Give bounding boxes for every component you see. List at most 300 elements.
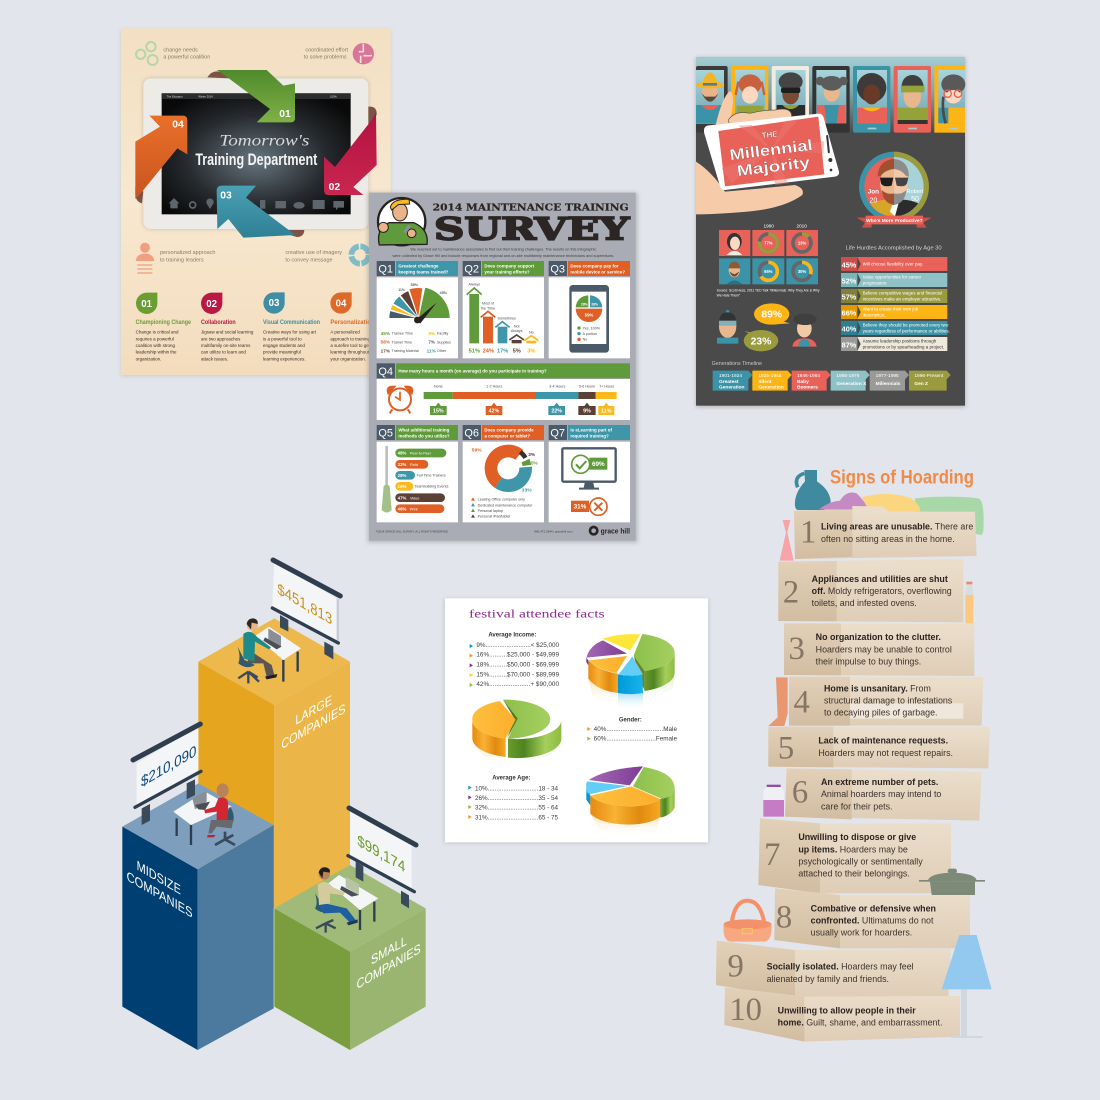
label: large companies: LARGE xyxy=(295,692,332,728)
jon vs robert circle: Jon xyxy=(868,189,879,196)
Q7 panel: Q7 xyxy=(550,428,565,440)
Q7 panel: Is eLearning part of xyxy=(570,427,612,432)
column: midsize companies xyxy=(122,783,274,1050)
life hurdles list: Value opportunities for career xyxy=(863,275,922,280)
legend: 58% xyxy=(381,340,391,345)
icon: lamp xyxy=(942,935,992,1038)
icon: imagery ring xyxy=(351,246,369,264)
intro text: We reached out to maintenance associates to find out their training challenges. The results on this infographic xyxy=(410,248,596,252)
icon: purple jar xyxy=(763,785,784,817)
badge 04 column: Personalization xyxy=(330,320,375,326)
donut chart: Personal laptop xyxy=(478,509,503,513)
jon vs robert circle xyxy=(859,152,929,222)
Q7 panel xyxy=(549,425,630,522)
legend: 9% xyxy=(428,331,436,336)
years comparison grid: We Hate Them" xyxy=(717,293,741,297)
donut chart xyxy=(471,441,539,519)
box 1 xyxy=(794,506,977,559)
arrow 03: teal: 03 xyxy=(220,190,232,201)
badge 03 column: Creative ways for using art xyxy=(263,330,317,335)
life hurdles list: 45% xyxy=(842,260,857,269)
box 8: 8 xyxy=(776,900,792,936)
badge 03 column: is a powerful tool to xyxy=(263,336,302,341)
Q6 panel: Q6 xyxy=(464,428,479,440)
stacked bar: 15% xyxy=(433,409,444,415)
icon: mascot xyxy=(378,198,427,245)
donut chart: Leasing Office computer only xyxy=(478,498,525,502)
box 5: 5 xyxy=(778,730,794,766)
phone: red hair xyxy=(731,66,768,133)
badge 03 column: provide meaningful xyxy=(263,350,301,355)
icon: phone with pie: No xyxy=(583,338,587,342)
bar chart: 51% xyxy=(469,348,480,354)
pie chart: income xyxy=(586,634,675,710)
list: gender: 60%............................Female xyxy=(594,736,677,743)
box 1: Living areas are unusable. There are xyxy=(821,522,973,532)
list: average income: 42%.......................+ $90,000 xyxy=(476,681,559,688)
Q6 panel: Does company provide xyxy=(484,427,534,432)
badge 02 column: 02 xyxy=(206,299,217,310)
Q2 panel: Q2 xyxy=(464,264,479,276)
badge 04 column: a surefire tool to get xyxy=(330,343,371,348)
icon: phone with pie: 28% xyxy=(581,302,588,306)
icon: laundry pile xyxy=(819,493,984,535)
stacked bar: 11% xyxy=(601,409,612,415)
list: average income: 18%..........$50,000 - $69,999 xyxy=(476,662,559,669)
stacked bar: 22% xyxy=(551,409,562,415)
Q3 panel: mobile device or service? xyxy=(570,269,625,274)
years comparison grid: 65% xyxy=(764,269,773,274)
billboard: large $451,813: $451,813 xyxy=(277,580,332,629)
box 10: 10 xyxy=(729,992,762,1028)
stacked bar: None xyxy=(434,384,443,388)
badge 03 column: Visual Communication xyxy=(263,320,320,326)
years comparison grid: 2010 xyxy=(796,224,807,229)
title: Tomorrow's: Tomorrow's xyxy=(219,133,309,150)
box 8: Combative or defensive when xyxy=(811,903,936,913)
life hurdles list: 87% xyxy=(842,340,857,349)
list: gender: Gender: xyxy=(619,717,642,723)
box 7: attached to their belongings. xyxy=(798,869,910,879)
arrow 04: orange: 04 xyxy=(172,120,184,131)
list: average income xyxy=(470,633,559,688)
icon: pink vase xyxy=(780,520,794,561)
person: midsize company desk xyxy=(173,783,235,845)
tablet: 100% xyxy=(330,95,337,99)
title: Signs of Hoarding xyxy=(830,467,974,488)
life hurdles list: progression. xyxy=(863,280,887,285)
list: average age: 32%.............................55 - 64 xyxy=(475,805,558,812)
life hurdles list: Believe they should be promoted every two xyxy=(863,323,949,328)
icon: man xyxy=(727,262,742,284)
box 2: 2 xyxy=(783,575,799,611)
life hurdles list: 57% xyxy=(842,292,857,301)
icon: coalition circles xyxy=(136,42,158,65)
icon: phone with pie: 28% xyxy=(591,302,598,306)
box 10: Unwilling to allow people in their xyxy=(778,1005,916,1015)
Q1 panel: Greatest challenge xyxy=(398,263,439,268)
text: coordinated effort: to solve problems xyxy=(304,55,347,61)
badge 02 column: can utilize to learn and xyxy=(201,350,246,355)
title: 2014 maintenance training: 2014 MAINTENANCE TRAINING xyxy=(433,204,629,214)
life hurdles list xyxy=(841,245,950,351)
generations timeline xyxy=(712,361,951,391)
jon vs robert circle: 50 xyxy=(911,196,919,203)
donut chart: 59% xyxy=(472,448,482,454)
life hurdles list: years regardless of performance or abilities. xyxy=(863,328,950,333)
stacked bar: 1-2 Hours xyxy=(486,384,503,388)
badge 04 column: A personalized xyxy=(330,330,360,335)
pill bars: 19% xyxy=(398,484,406,489)
list: average age: 10%.............................18 - 34 xyxy=(475,785,558,792)
icon: phone with pie: A portion xyxy=(583,332,597,336)
arrow 04: orange xyxy=(135,116,187,203)
life hurdles list: 40% xyxy=(842,324,857,333)
box 6: Animal hoarders may intend to xyxy=(821,789,941,799)
badge 02 column: multifamily on-site teams xyxy=(201,343,251,348)
billboard: midsize $210,090: $210,090 xyxy=(141,742,196,791)
icon: puzzle circle xyxy=(353,43,374,64)
Q5 panel: methods do you utilize? xyxy=(398,433,450,438)
bar chart: 24% xyxy=(483,348,494,354)
badge 02 column: Collaboration xyxy=(201,320,236,326)
generations timeline: Generation xyxy=(719,385,745,391)
pill bars: Field xyxy=(410,463,418,467)
years comparison grid: Source: Scott Hess, 2011 TED Talk "Millennials: Why They Are & Why xyxy=(717,289,820,293)
generations timeline: Silent xyxy=(758,379,772,385)
icon: monitor with check: 69% xyxy=(592,461,605,468)
stacked bar: 5-6 Hours xyxy=(579,384,595,388)
generations timeline: Millennials xyxy=(876,381,901,387)
legend: Other xyxy=(437,349,447,353)
icon: x mark: 31% xyxy=(574,504,587,511)
legend xyxy=(381,331,451,353)
footer: grace hill xyxy=(601,526,630,535)
phone: hat man xyxy=(696,66,728,133)
box 9: 9 xyxy=(728,949,744,985)
box 3: 3 xyxy=(789,631,805,667)
icon: person and list xyxy=(136,243,154,274)
Q3 panel xyxy=(549,261,630,358)
life hurdles list: Will choose flexibility over pay. xyxy=(863,261,923,266)
generations timeline: 1901-1924 xyxy=(719,373,742,379)
life hurdles list: Believe competitive wages and financial xyxy=(863,291,942,296)
pill bars: 48% xyxy=(398,451,406,456)
pill bars: Full Time Trainers xyxy=(417,474,446,478)
person: small company desk xyxy=(315,867,378,933)
badge 01 column: coalition with strong xyxy=(136,343,176,348)
life hurdles list: incentives make an employer attractive. xyxy=(863,296,941,301)
text: creative imagery: to convey message xyxy=(285,257,333,263)
Q1 panel: 11% xyxy=(398,288,405,292)
donut chart: Dedicated maintenance computer xyxy=(478,503,533,507)
tablet xyxy=(143,78,368,229)
badge 03 column: 03 xyxy=(269,298,280,309)
box 2: off. Moldy refrigerators, overflowing xyxy=(812,586,952,596)
Q2 panel: your training efforts? xyxy=(484,269,530,274)
list: gender xyxy=(587,717,677,743)
badge 02 column xyxy=(201,293,254,361)
box 7: 7 xyxy=(764,837,780,873)
life hurdles list: Assume leadership positions through xyxy=(863,339,937,344)
list: average age: Average Age: xyxy=(492,775,530,781)
box 9 xyxy=(716,941,951,998)
box 1: 1 xyxy=(800,515,816,551)
donut chart: 33% xyxy=(522,488,532,494)
years comparison grid: 1980 xyxy=(763,224,774,229)
life hurdles list: 66% xyxy=(842,308,857,317)
box 4: 4 xyxy=(794,684,810,720)
generations timeline: Gen Z xyxy=(914,381,928,387)
badge 04 column: your organization. xyxy=(330,356,366,361)
pie chart: age xyxy=(586,766,675,838)
generations timeline: 1925-1945 xyxy=(758,373,782,379)
box 5 xyxy=(768,727,990,768)
text: personalized approach: personalized approach xyxy=(160,250,215,256)
generations timeline: Baby xyxy=(797,379,809,385)
badge 01 column: Change is critical and xyxy=(136,330,179,335)
box 6 xyxy=(785,768,982,821)
ribbon: who's more productive xyxy=(857,216,932,228)
Q7 panel: required training? xyxy=(570,433,609,438)
badge 01 column: organization. xyxy=(136,356,161,361)
Q1 panel xyxy=(377,261,458,358)
Q5 panel: What additional training xyxy=(398,427,450,432)
bar chart: Not xyxy=(514,325,520,329)
pill bars: Print xyxy=(410,507,418,511)
life hurdles list: Want to create their own job xyxy=(863,307,919,312)
footer: 866.472.2944 | gracehill.com xyxy=(534,530,573,534)
panel: millennial majority poster xyxy=(696,58,965,407)
years comparison grid: 30% xyxy=(798,269,806,274)
title: survey: SURVEY xyxy=(434,211,631,247)
title: the millennial majority: Majority xyxy=(736,154,811,180)
Q6 panel xyxy=(463,425,544,522)
generations timeline: 1946-1964 xyxy=(797,373,820,379)
column: small companies xyxy=(274,865,426,1050)
badge 01 column: 01 xyxy=(141,299,153,310)
legend: 7% xyxy=(428,340,436,345)
speech bubbles with people: 89% xyxy=(761,310,782,321)
box 3: No organization to the clutter. xyxy=(816,632,941,642)
Q4 panel: How many hours a month (on average) do you participate in training? xyxy=(398,368,547,373)
label: small companies: SMALL xyxy=(371,932,407,968)
icon: beanie person xyxy=(717,310,738,344)
list: average income: 16%..........$25,000 - $49,999 xyxy=(476,652,559,659)
life hurdles list: 52% xyxy=(842,276,857,285)
pill bars xyxy=(395,449,449,513)
intro text xyxy=(392,248,614,258)
jon vs robert circle: Robert xyxy=(907,189,924,195)
icon: woman xyxy=(727,233,742,255)
phone: buns xyxy=(812,66,850,133)
stacked bar: 7+ Hours xyxy=(599,384,614,388)
Q1 panel: 58% xyxy=(411,283,419,287)
box 7: psychologically or sentimentally xyxy=(798,856,923,866)
label: large companies: COMPANIES xyxy=(281,700,345,752)
title: festival attendee facts xyxy=(469,607,605,621)
text: coordinated effort xyxy=(304,48,348,61)
box 7: up items. Hoarders may be xyxy=(798,844,908,854)
text: creative imagery: creative use of imagery xyxy=(285,250,342,256)
box 2: Appliances and utilities are shut xyxy=(812,574,948,584)
donut chart: 3% xyxy=(528,452,536,457)
Q4 panel: Q4 xyxy=(378,366,393,378)
generations timeline: Generations Timeline xyxy=(712,361,762,367)
title: Training Department: Training Department xyxy=(195,150,318,169)
box 9: Socially isolated. Hoarders may feel xyxy=(767,962,914,972)
badge 03 column: learning experiences. xyxy=(263,356,306,361)
pill bars: 47% xyxy=(398,495,406,500)
box 2: toilets, and infested ovens. xyxy=(812,598,917,608)
icon: handbag xyxy=(723,901,772,942)
icon: bottle xyxy=(965,582,974,623)
badge 02 column: Jigsaw and social learning xyxy=(201,330,254,335)
Q1 panel: 45% xyxy=(440,291,448,295)
donut chart: Personal iPad/tablet xyxy=(478,515,510,519)
box 5: Hoarders may not request repairs. xyxy=(818,748,953,758)
Q3 panel: Q3 xyxy=(550,264,565,276)
icon: pot xyxy=(919,869,985,895)
label: midsize companies: COMPANIES xyxy=(127,868,193,921)
bar chart: Sometimes xyxy=(498,316,516,320)
pill bars: 28% xyxy=(398,473,406,478)
badge 04 column: 04 xyxy=(336,299,347,310)
arrow 02: red xyxy=(324,107,377,195)
arrow 01: green xyxy=(207,70,295,122)
pill bars: Peer-to-Peer xyxy=(410,452,432,456)
badge 04 column xyxy=(330,292,375,361)
bar chart: Most of xyxy=(482,302,495,306)
box 4: Home is unsanitary. From xyxy=(824,683,931,693)
pie chart: gender xyxy=(472,700,561,769)
life hurdles list: description. xyxy=(863,312,886,317)
badge 02 column: are two approaches xyxy=(201,336,241,341)
phone: shades xyxy=(772,66,809,133)
Q2 panel xyxy=(463,261,544,358)
Q3 panel: Does company pay for xyxy=(570,263,619,268)
box 10: home. Guilt, shame, and embarrassment. xyxy=(778,1018,942,1028)
box 2 xyxy=(778,559,963,622)
list: gender: 40%................................Male xyxy=(594,726,677,733)
billboard: small $99,174: $99,174 xyxy=(357,832,406,877)
pill bars: Video xyxy=(410,496,419,500)
badge 01 column: Championing Change xyxy=(136,320,192,326)
legend: Trainee Time xyxy=(392,332,413,336)
title: the millennial majority xyxy=(729,129,814,180)
box 7 xyxy=(758,818,951,893)
title: the millennial majority: THE xyxy=(761,129,779,140)
column: large companies xyxy=(198,618,350,908)
Q6 panel: a computer or tablet? xyxy=(484,433,530,438)
phone: title card xyxy=(704,114,839,190)
speech bubbles with people: 23% xyxy=(751,336,771,347)
icon: phone with pie: Yes, 100% xyxy=(583,326,601,330)
box 3: Hoarders may be unable to control xyxy=(816,644,952,654)
text: coordinated effort: coordinated effort xyxy=(305,48,348,54)
icon: jug xyxy=(795,470,831,510)
icon: phone with pie: 59% xyxy=(585,313,593,318)
panel: festival attendee facts xyxy=(444,598,708,843)
legend: 17% xyxy=(381,348,391,353)
arrow 03: teal xyxy=(217,186,304,238)
text: coalition: change needs xyxy=(163,48,198,54)
box 5: Lack of maintenance requests. xyxy=(818,736,948,746)
Q1 panel: Q1 xyxy=(378,264,393,276)
legend: Facility xyxy=(437,332,449,336)
title: the millennial majority: Millennial xyxy=(729,137,814,164)
tablet: The Educator xyxy=(167,95,183,99)
list: average income: Average Income: xyxy=(488,633,536,639)
text: personalized approach: to training leaders xyxy=(160,257,204,263)
speech bubbles with people xyxy=(717,303,817,351)
box 6: An extreme number of pets. xyxy=(821,777,938,787)
life hurdles list: Life Hurdles Accomplished by Age 30 xyxy=(846,245,942,251)
box 7: Unwilling to dispose or give xyxy=(798,832,916,842)
text: personalized approach xyxy=(160,250,215,263)
icon: screwdriver xyxy=(382,446,392,512)
generations timeline: Generation X xyxy=(836,381,867,387)
label: small companies: COMPANIES xyxy=(357,940,421,992)
pill bars: Teambuilding Events xyxy=(415,485,449,489)
box 1: often no sitting areas in the home. xyxy=(821,534,955,544)
badge 04 column: approach to training is xyxy=(330,336,375,341)
life hurdles list: promotions or by spearheading a project. xyxy=(863,344,944,349)
bar chart: Always xyxy=(469,282,480,286)
text: creative imagery xyxy=(285,250,342,263)
badge 03 column: engage students and xyxy=(263,343,305,348)
intro text: were collected by Grace Hill and include responses from regional and on-site multifamily maintenance technicians and supervisors. xyxy=(392,254,614,258)
box 8: confronted. Ultimatums do not xyxy=(811,915,934,925)
billboard: small $99,174 xyxy=(348,808,416,908)
ribbon: who's more productive: Who's More Productive? xyxy=(866,218,923,224)
box 4: structural damage to infestations xyxy=(824,695,953,705)
generations timeline: Generation xyxy=(758,385,784,391)
box 6: care for their pets. xyxy=(821,801,893,811)
bar chart: 3% xyxy=(527,348,535,354)
tablet: Winter 2014 xyxy=(198,95,213,99)
icon: curly person xyxy=(792,314,817,347)
legend: Training Material xyxy=(392,349,419,353)
legend: Supplies xyxy=(437,340,451,344)
generations timeline: 1996-Present xyxy=(914,373,944,379)
box 4: to decaying piles of garbage. xyxy=(824,708,937,718)
phone: glasses xyxy=(934,66,965,133)
phone: afro xyxy=(853,66,890,133)
jon vs robert circle: 20 xyxy=(869,197,877,204)
phones row xyxy=(696,66,965,133)
hand xyxy=(696,91,803,214)
phone: beanie xyxy=(894,66,931,133)
arrow 02: red: 02 xyxy=(329,182,340,193)
list: average income: 15%..........$70,000 - $89,999 xyxy=(476,671,559,678)
badge 01 column xyxy=(136,293,192,361)
badge 01 column: leadership within the xyxy=(136,350,177,355)
panel: isometric company salary columns xyxy=(122,560,426,1050)
list: average income: 9%..........................< $25,000 xyxy=(476,642,559,649)
badge 01 column: requires a powerful xyxy=(136,336,174,341)
generations timeline: Boomers xyxy=(797,385,818,391)
stacked bar: 3-4 Hours xyxy=(549,384,566,388)
box 3 xyxy=(784,623,974,676)
arrow 01: green: 01 xyxy=(279,109,291,120)
panel: signs of hoarding xyxy=(716,467,992,1042)
person: large company desk xyxy=(238,618,301,683)
Q5 panel: Q5 xyxy=(378,428,393,440)
box 9: alienated by family and friends. xyxy=(767,974,889,984)
footer: ©2014 GRACE HILL SURVEY, ALL RIGHTS RESERVED xyxy=(376,530,448,534)
generations timeline: Greatest xyxy=(719,379,739,385)
